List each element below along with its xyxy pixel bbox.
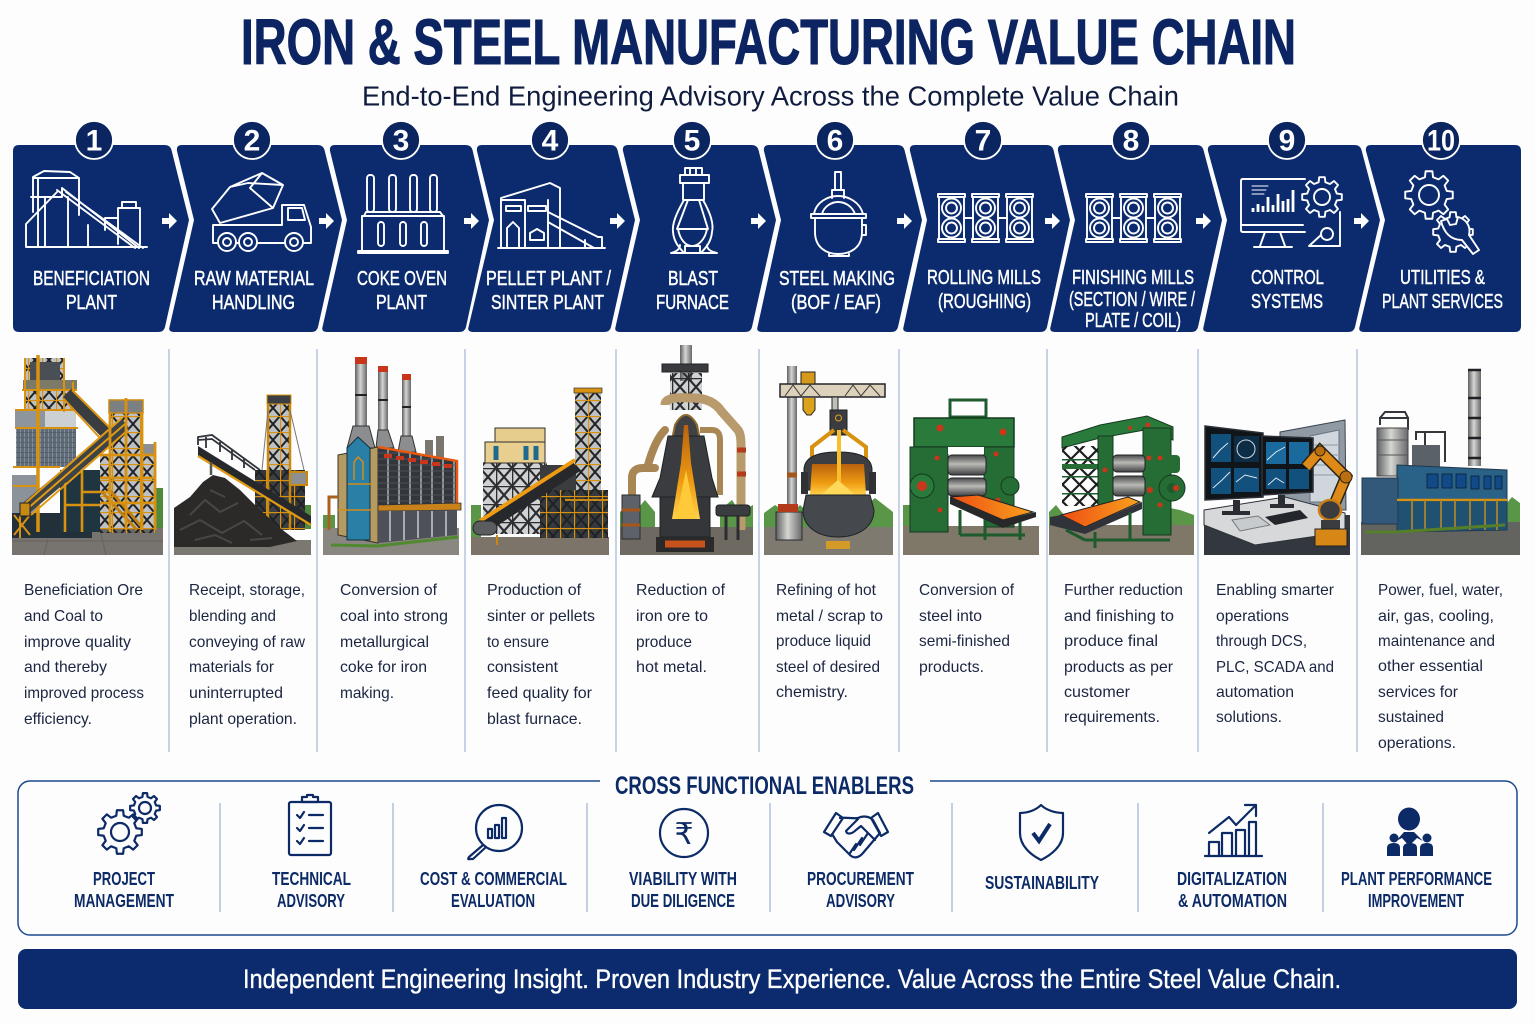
panel: step 10 utilities and plant services [1359,121,1521,332]
badge 2 [233,121,271,159]
label: PLANT [376,292,427,314]
text: finishing mills description: requirements. [1064,709,1160,726]
text: control systems description: automation [1216,684,1294,701]
illustration: pellet and sinter plant [471,388,609,555]
arrow 8 [1196,213,1211,229]
text: finishing mills description [1064,582,1183,726]
panel: step 6 steel making [757,121,922,332]
panel: step 8 finishing mills [1050,121,1222,332]
heading: cross functional enablers: CROSS FUNCTIONAL ENABLERS [615,772,914,800]
text: coke oven description: metallurgical [340,634,429,651]
illustration: raw material handling with coal pile [174,395,311,555]
text: raw material description: plant operation. [189,711,297,728]
badge 10: 10 [1427,124,1455,158]
arrow 4 [610,213,625,229]
icon: gears [98,793,160,854]
icon: finishing stands [1086,194,1181,242]
label [194,268,314,314]
icon: converter vessel [811,172,866,256]
enabler label: digitalization and automation [1177,869,1287,911]
enabler label: technical advisory: ADVISORY [277,891,345,911]
subtitle: End-to-End Engineering Advisory Across the Complete Value Chain [362,80,1179,112]
badge 1 [75,121,113,159]
text: pellet plant description: to ensure [487,634,549,651]
text: pellet plant description: Production of [487,582,582,599]
panel: step 2 raw material handling [169,121,342,332]
badge 3 [382,121,420,159]
icon: pellet plant [498,183,605,248]
enabler label: viability with due diligence: DUE DILIGENCE [631,891,735,911]
text: beneficiation description: and thereby [24,659,107,676]
label: UTILITIES & [1400,267,1485,289]
text: raw material description: uninterrupted [189,685,283,702]
text: coke oven description: making. [340,685,394,702]
panel: step 5 blast furnace [615,121,776,332]
label: CONTROL [1251,267,1324,289]
text: pellet plant description: consistent [487,659,559,676]
text: blast furnace description: iron ore to [636,608,708,625]
enabler label: plant performance improvement [1341,869,1492,911]
enabler label: project management [74,869,174,911]
enabler label: digitalization and automation: & AUTOMATION [1178,891,1287,911]
arrow 9 [1354,213,1369,229]
text: steel making description: produce liquid [776,633,871,650]
label: FINISHING MILLS [1072,267,1194,289]
label: PELLET PLANT / [486,268,611,290]
text: steel making description: Refining of hot [776,582,877,599]
illustration: blast furnace [620,345,753,555]
text: finishing mills description: and finishing to [1064,608,1174,625]
illustration: steel ladle and crane [764,366,893,555]
label: STEEL MAKING [779,268,895,290]
footer banner [18,949,1517,1009]
text: utilities description [1378,582,1503,752]
text: steel making description [776,582,883,701]
label [656,268,729,314]
badge 5 [673,121,711,159]
label: SYSTEMS [1251,291,1323,313]
text: raw material description: blending and [189,608,276,625]
panel: step 7 rolling mills [903,121,1070,332]
text: finishing mills description: customer [1064,684,1131,701]
enabler label: procurement advisory: ADVISORY [826,891,895,911]
label [33,268,150,314]
label: (BOF / EAF) [791,292,881,314]
label [357,268,447,314]
label: (ROUGHING) [938,291,1031,313]
text: beneficiation description: improve quality [24,634,131,651]
label [486,268,611,314]
text: steel making description: chemistry. [776,684,848,701]
text: control systems description [1216,582,1335,726]
badge 9 [1268,121,1306,159]
text: raw material description: Receipt, storage, [189,582,305,599]
label: FURNACE [656,292,729,314]
illustration: finishing mill [1049,416,1194,555]
icon: team [1387,808,1433,856]
text: control systems description: Enabling smarter [1216,582,1335,599]
enabler label: procurement advisory [807,869,914,911]
icon: monitor and gear [1241,177,1342,247]
text: steel making description: metal / scrap to [776,608,883,625]
text: rolling mills description [919,582,1015,676]
enabler label: digitalization and automation: DIGITALIZATION [1177,869,1287,889]
arrow 5 [751,213,766,229]
text: pellet plant description: blast furnace. [487,711,582,728]
text: utilities description: sustained [1378,709,1444,726]
badge 8 [1112,121,1150,159]
badge 7 [964,121,1002,159]
panel: step 4 pellet and sinter plant [468,121,635,332]
icon: gears and wrench [1405,171,1479,254]
label: RAW MATERIAL [194,268,314,290]
text: raw material description [189,582,305,728]
enabler label: viability with due diligence: VIABILITY WITH [629,869,737,889]
text: beneficiation description [24,582,144,728]
text: rolling mills description: steel into [919,608,982,625]
enabler label: sustainability: SUSTAINABILITY [985,873,1099,893]
enabler label: cost and commercial evaluation: COST & COMMERCIAL [420,869,567,889]
label [1382,267,1503,313]
illustration: roughing rolling mill [903,400,1039,555]
icon: rupee circle: ₹ [674,817,694,852]
text: rolling mills description: Conversion of [919,582,1015,599]
badge 6 [816,121,854,159]
text: utilities description: Power, fuel, water, [1378,582,1503,599]
arrow 6 [897,213,912,229]
arrow 2 [319,213,334,229]
badge 8: 8 [1123,124,1139,158]
enabler label: technical advisory: TECHNICAL [272,869,351,889]
text: beneficiation description: improved process [24,685,144,702]
icon: dump truck [212,173,311,251]
label: COKE OVEN [357,268,447,290]
icon: clipboard checklist [289,795,331,855]
badge 3: 3 [393,124,409,158]
text: rolling mills description: products. [919,659,984,676]
icon: rolling stands [938,194,1033,242]
badge 1: 1 [86,124,102,158]
enabler label: project management: PROJECT [93,869,155,889]
text: coke oven description: Conversion of [340,582,438,599]
enabler label: cost and commercial evaluation: EVALUATION [451,891,535,911]
enabler label: viability with due diligence [629,869,737,911]
icon: rupee circle [660,809,708,857]
illustration: coke oven plant [323,357,461,555]
label: SINTER PLANT [491,292,604,314]
text: beneficiation description: and Coal to [24,608,103,625]
text: beneficiation description: efficiency. [24,711,92,728]
icon: handshake [824,813,888,857]
label [1251,267,1324,313]
text: utilities description: other essential [1378,658,1483,675]
text: finishing mills description: Further reduction [1064,582,1183,599]
text: utilities description: air, gas, cooling, [1378,608,1494,625]
icon: blast furnace [671,168,717,253]
column separators [169,349,1357,752]
footer banner: Independent Engineering Insight. Proven Industry Experience. Value Across the Entire Steel Value Chain. [243,964,1341,994]
text: pellet plant description: sinter or pellets [487,608,595,625]
text: control systems description: solutions. [1216,709,1282,726]
badge 5: 5 [684,124,700,158]
text: raw material description: conveying of raw [189,634,305,651]
enabler label: technical advisory [272,869,351,911]
text: raw material description: materials for [189,659,275,676]
panel: cross functional enablers [18,772,1517,935]
illustration: control room [1204,420,1352,555]
enabler label: plant performance improvement: IMPROVEMENT [1368,891,1464,911]
label: BENEFICIATION [33,268,150,290]
panel: step 3 coke oven plant [322,121,489,332]
text: beneficiation description: Beneficiation Ore [24,582,143,599]
text: utilities description: operations. [1378,735,1456,752]
text: control systems description: PLC, SCADA and [1216,659,1334,676]
arrow 7 [1045,213,1060,229]
badge 6: 6 [827,124,843,158]
text: rolling mills description: semi-finished [919,633,1010,650]
text: control systems description: through DCS, [1216,633,1307,650]
text: utilities description: services for [1378,684,1459,701]
text: blast furnace description: hot metal. [636,659,707,676]
badge 4 [531,121,569,159]
text: coke oven description: coal into strong [340,608,448,625]
text: coke oven description [340,582,448,702]
icon: beneficiation plant [26,171,147,248]
text: steel making description: steel of desired [776,659,880,676]
label [779,268,895,314]
arrow 3 [464,213,479,229]
badge 2: 2 [244,124,260,158]
icon: coke oven [358,175,448,253]
badge 4: 4 [542,124,559,158]
illustration: beneficiation plant [12,355,163,555]
arrow 1 [162,213,177,229]
text: pellet plant description: feed quality for [487,685,593,702]
label: (SECTION / WIRE / [1069,289,1195,311]
icon: shield check [1020,805,1063,860]
label: ROLLING MILLS [927,267,1041,289]
text: blast furnace description: produce [636,634,692,651]
enabler label: project management: MANAGEMENT [74,891,174,911]
label [1069,267,1195,332]
enabler label: procurement advisory: PROCUREMENT [807,869,914,889]
text: pellet plant description [487,582,595,728]
icon: growth chart [1205,805,1262,856]
illustration: utilities plant [1361,370,1520,555]
panel: step 9 control systems [1203,121,1380,332]
label: BLAST [668,268,718,290]
icon: magnifier with chart [468,805,522,859]
panel: step 1 beneficiation plant [13,121,189,332]
badge 9: 9 [1279,124,1295,158]
text: blast furnace description [636,582,726,676]
text: finishing mills description: products as per [1064,659,1174,676]
label: PLATE / COIL) [1085,310,1181,332]
text: finishing mills description: produce final [1064,633,1158,650]
text: control systems description: operations [1216,608,1289,625]
label [927,267,1041,313]
text: utilities description: maintenance and [1378,633,1495,650]
text: coke oven description: coke for iron [340,659,427,676]
badge 7: 7 [975,124,991,158]
enabler label: cost and commercial evaluation [420,869,567,911]
label: HANDLING [212,292,295,314]
text: blast furnace description: Reduction of [636,582,726,599]
label: PLANT [66,292,117,314]
